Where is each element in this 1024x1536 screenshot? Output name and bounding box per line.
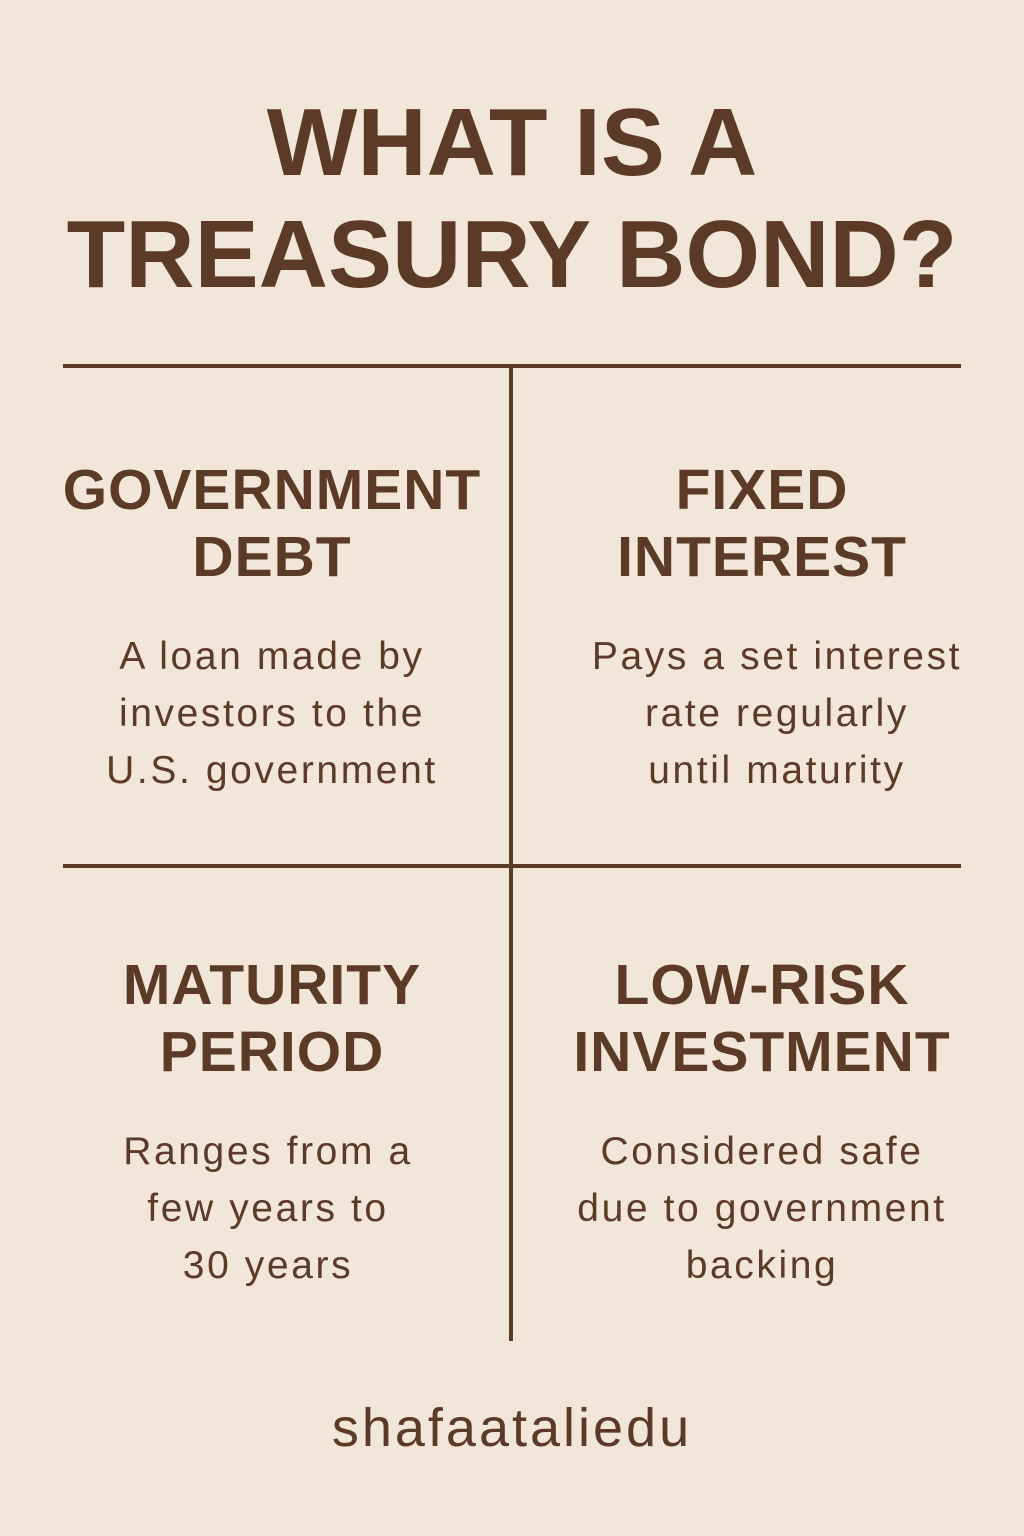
text: government debt: investors to the: [119, 692, 425, 735]
text: maturity period: 30 years: [183, 1244, 353, 1287]
heading: fixed interest: INTEREST: [617, 525, 907, 589]
heading: government debt: [63, 458, 481, 589]
text: fixed interest: until maturity: [648, 749, 906, 792]
panel: maturity period: [123, 953, 421, 1287]
text: maturity period: [123, 1130, 413, 1287]
text: fixed interest: rate regularly: [645, 692, 909, 735]
text: maturity period: few years to: [147, 1187, 389, 1230]
title: [67, 89, 957, 308]
text: government debt: [106, 635, 438, 792]
text: low-risk investment: due to government: [577, 1187, 947, 1230]
text: government debt: A loan made by: [119, 635, 425, 678]
text: low-risk investment: backing: [686, 1244, 838, 1287]
heading: low-risk investment: [573, 953, 951, 1084]
heading: maturity period: [123, 953, 421, 1084]
panel: government debt: [63, 458, 481, 792]
heading: government debt: GOVERNMENT: [63, 458, 481, 522]
text: low-risk investment: [577, 1130, 947, 1287]
footer: shafaataliedu: [332, 1398, 692, 1458]
text: maturity period: Ranges from a: [123, 1130, 413, 1173]
title: WHAT IS A: [267, 89, 757, 196]
heading: maturity period: PERIOD: [160, 1020, 384, 1084]
text: fixed interest: [592, 635, 962, 792]
panel: low-risk investment: [573, 953, 951, 1287]
heading: fixed interest: FIXED: [676, 458, 848, 522]
text: low-risk investment: Considered safe: [600, 1130, 924, 1173]
text: fixed interest: Pays a set interest: [592, 635, 962, 678]
title: TREASURY BOND?: [67, 201, 957, 308]
heading: low-risk investment: LOW-RISK: [614, 953, 909, 1017]
text: government debt: U.S. government: [106, 749, 438, 792]
heading: government debt: DEBT: [192, 525, 352, 589]
heading: low-risk investment: INVESTMENT: [573, 1020, 951, 1084]
panel: fixed interest: [592, 458, 962, 792]
heading: fixed interest: [617, 458, 907, 589]
heading: maturity period: MATURITY: [123, 953, 421, 1017]
